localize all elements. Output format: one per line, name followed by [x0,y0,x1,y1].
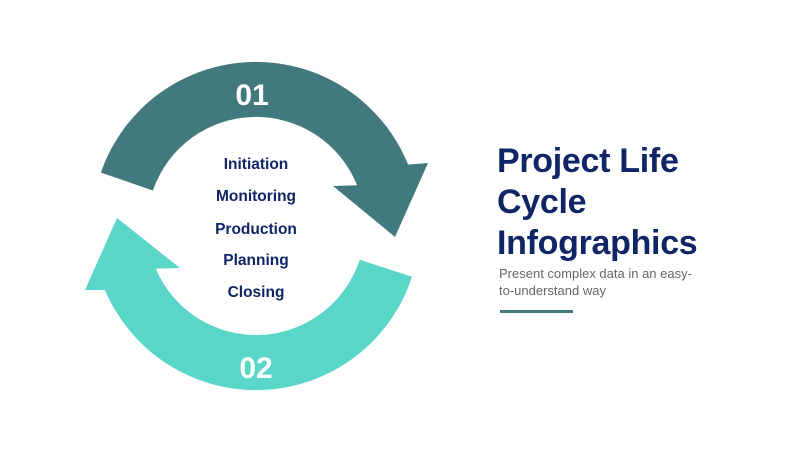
title: Cycle [497,183,586,221]
subtitle: to-understand way [499,283,606,298]
stage list: Closing [228,284,284,301]
accent line [500,310,573,313]
arrow: top 01 [101,62,428,237]
stage list [215,156,297,301]
title: Infographics [497,224,697,262]
arrow: bottom 02 [85,218,412,390]
arrow: top 01: 01 [235,79,269,112]
stage list: Monitoring [216,188,296,205]
title [497,142,697,262]
subtitle [499,266,692,298]
arrow: bottom 02: 02 [239,352,273,385]
subtitle: Present complex data in an easy- [499,266,692,281]
stage list: Planning [223,252,289,269]
stage list: Production [215,221,297,238]
stage list: Initiation [224,156,288,173]
title: Project Life [497,142,679,180]
